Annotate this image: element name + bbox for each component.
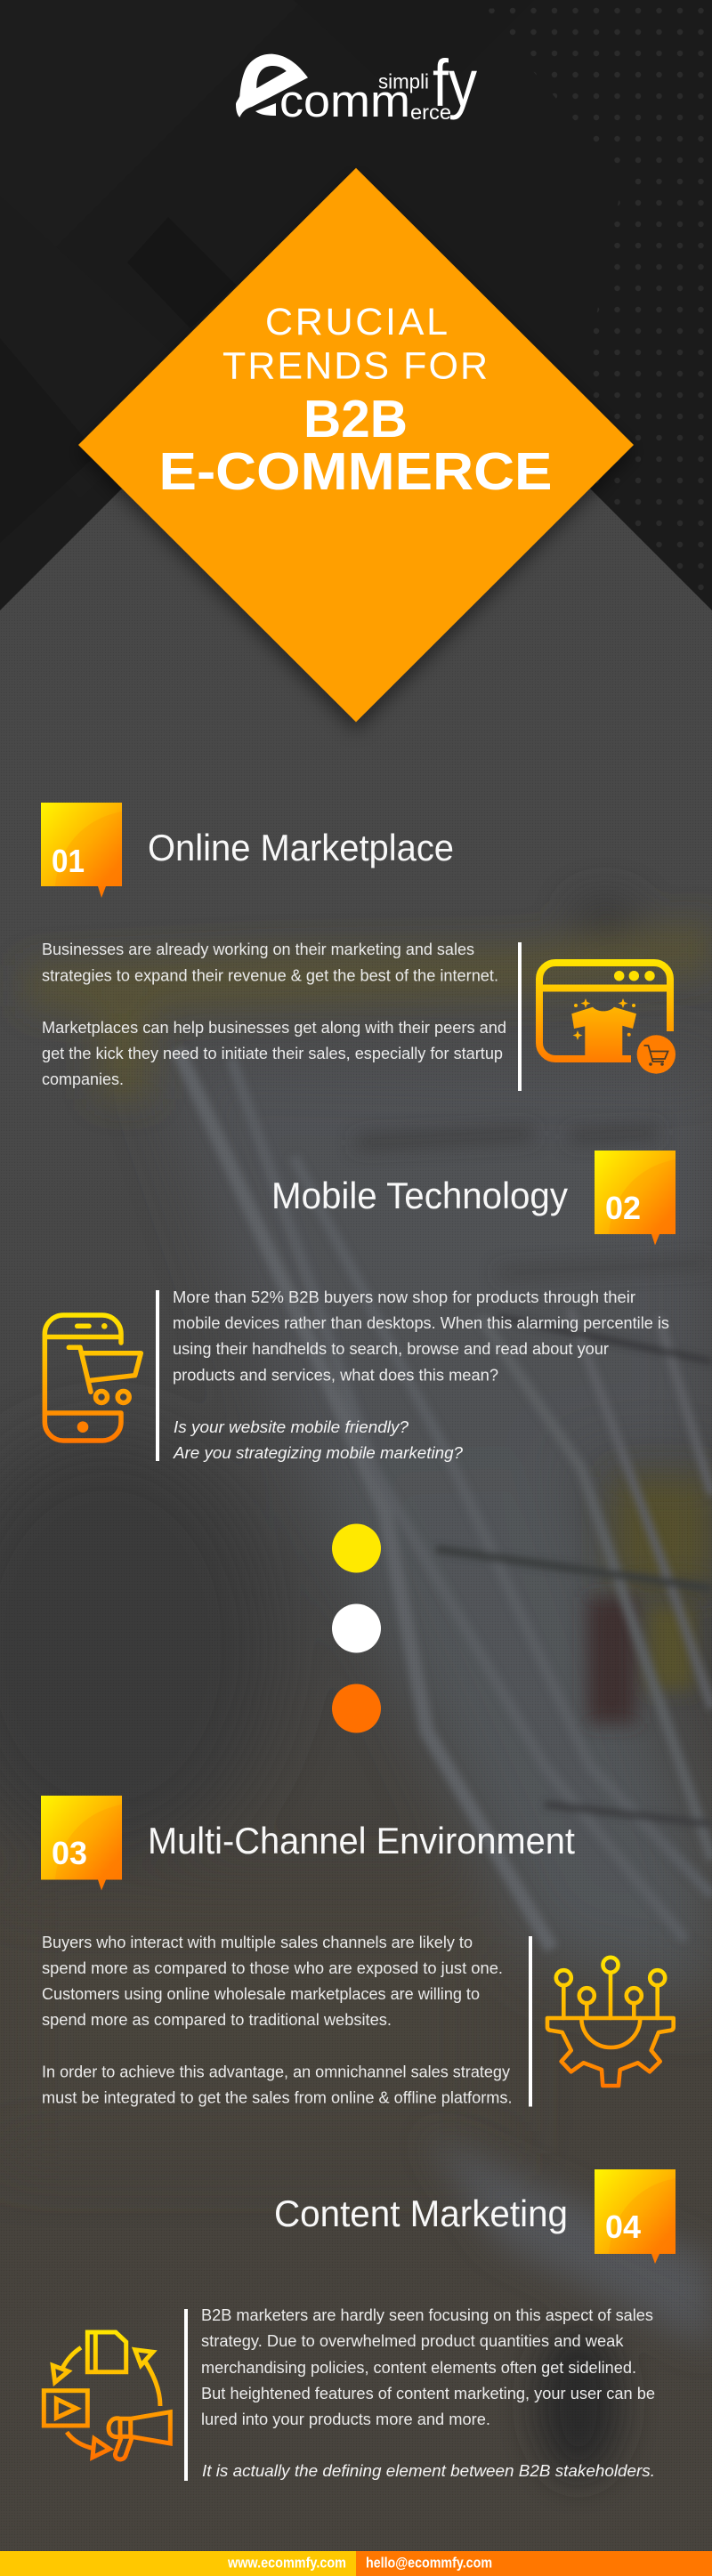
title diamond: E-COMMERCE [158, 442, 552, 501]
text block: section 1 [42, 940, 506, 1088]
blurred shopping cart photo background [0, 892, 712, 2551]
title diamond [78, 168, 634, 731]
text block: section 1: strategies to expand their revenue & get the best of the internet. [42, 966, 498, 984]
badge 04: 04 [605, 2209, 641, 2245]
text block: section 4: It is actually the defining element between B2B stakeholders. [202, 2461, 655, 2480]
text block: section 4: B2B marketers are hardly seen focusing on this aspect of sales [201, 2305, 653, 2324]
footer bar: www.ecommfy.com [227, 2554, 346, 2572]
logo: fy [433, 46, 477, 120]
icon: phone with shopping cart [44, 1315, 141, 1441]
footer bar [0, 2551, 712, 2576]
heading: Online Marketplace: Online Marketplace [148, 827, 454, 868]
icon: gear with circuit nodes [547, 1958, 674, 2086]
badge 02 [595, 1151, 676, 1246]
logo: erce [410, 101, 451, 124]
dark geometric header background [0, 0, 712, 610]
text block: section 3: spend more as compared to those who are exposed to just one. [42, 1958, 503, 1977]
text block: section 4: But heightened features of content marketing, your user can be [201, 2384, 655, 2402]
text block: section 2: using their handhelds to search, browse and read about your [173, 1339, 609, 1358]
title diamond: B2B [303, 390, 408, 448]
text block: section 3: Customers using online wholesale marketplaces are willing to [42, 1984, 480, 2003]
text block: section 1: Businesses are already working on their marketing and sales [42, 940, 474, 958]
badge 02: 02 [605, 1190, 641, 1226]
text block: section 1: Marketplaces can help businesses get along with their peers and [42, 1018, 506, 1037]
text block: section 3: spend more as compared to traditional websites. [42, 2010, 392, 2029]
icon: online store window with shirt and cart [539, 963, 676, 1074]
text block: section 2 [173, 1288, 669, 1462]
badge 01: 01 [52, 843, 85, 879]
text block: section 3: must be integrated to get the sales from online & offline platforms. [42, 2087, 513, 2107]
text block: section 4: lured into your products more and more. [201, 2410, 490, 2428]
text block: section 3: In order to achieve this advantage, an omnichannel sales strategy [42, 2063, 511, 2080]
text block: section 2: Is your website mobile friendly? [174, 1417, 409, 1436]
text block: section 3 [42, 1933, 513, 2107]
heading: Content Marketing: Content Marketing [274, 2192, 568, 2234]
heading: Multi-Channel Environment: Multi-Channel Environment [148, 1820, 575, 1861]
text block: section 2: mobile devices rather than desktops. When this alarming percentile is [173, 1313, 669, 1332]
title diamond: CRUCIAL [265, 301, 448, 343]
text block: section 4: merchandising policies, content elements often get sidelined. [201, 2358, 636, 2377]
three divider dots [332, 1523, 381, 1733]
logo: comm [279, 76, 410, 126]
badge 01 [41, 803, 122, 898]
badge 03 [41, 1796, 122, 1890]
icon: content marketing cycle [44, 2332, 170, 2459]
badge 03: 03 [52, 1835, 87, 1871]
text block: section 3: Buyers who interact with multiple sales channels are likely to [42, 1933, 473, 1951]
text block: section 4 [201, 2305, 655, 2480]
footer bar: hello@ecommfy.com [366, 2554, 492, 2572]
text block: section 1: companies. [42, 1070, 124, 1088]
heading: Mobile Technology: Mobile Technology [271, 1175, 568, 1216]
badge 04 [595, 2169, 676, 2264]
text block: section 1: get the kick they need to initiate their sales, especially for startup [42, 1044, 503, 1062]
text block: section 2: products and services, what does this mean? [173, 1365, 498, 1385]
text block: section 2: Are you strategizing mobile marketing? [173, 1443, 464, 1462]
logo: simpli [378, 69, 429, 93]
text block: section 4: strategy. Due to overwhelmed product quantities and weak [201, 2331, 624, 2350]
text block: section 2: More than 52% B2B buyers now shop for products through their [173, 1288, 635, 1306]
logo [236, 46, 477, 126]
title diamond: TRENDS FOR [222, 345, 488, 388]
